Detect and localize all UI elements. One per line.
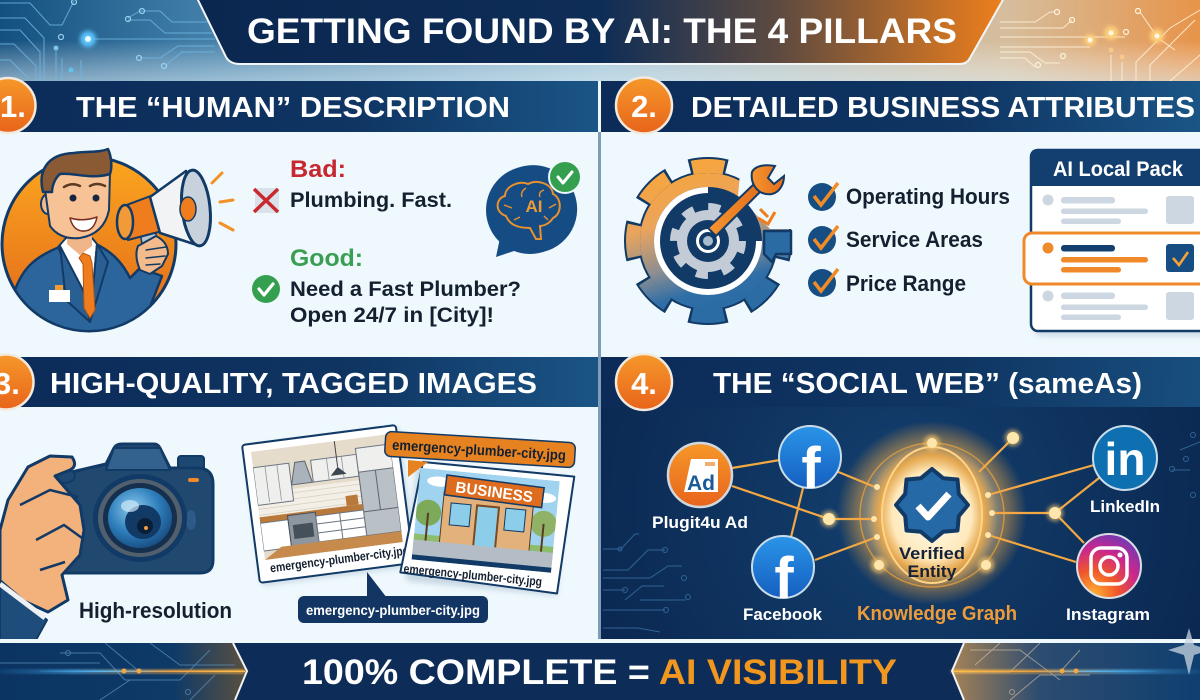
label: knowledge graph: Knowledge Graph <box>857 603 1017 625</box>
icon: gear and wrench <box>633 150 800 316</box>
AI local pack card: AI Local Pack <box>1053 158 1183 181</box>
item: operating hours <box>808 183 1010 211</box>
node: Instagram <box>1066 534 1150 624</box>
verified entity badge: Verified <box>899 544 965 563</box>
node: Facebook bottom <box>743 536 823 624</box>
number badge 3 <box>0 354 34 410</box>
highlighted row 2 <box>1024 233 1200 284</box>
node: Facebook bottom: Facebook <box>743 605 823 624</box>
panel 4 header: THE “SOCIAL WEB” (sameAs) <box>713 368 1142 400</box>
graph connection lines <box>732 438 1099 562</box>
panel 4: the social web <box>601 354 1200 639</box>
panel 1 header <box>0 81 598 132</box>
panel 3 header: HIGH-QUALITY, TAGGED IMAGES <box>50 368 537 400</box>
verified entity badge <box>896 469 968 581</box>
icon: camera held in hand <box>0 444 213 640</box>
divider between columns <box>598 132 601 639</box>
graph nodes <box>821 430 1063 573</box>
node: Plugit4u Ad: Ad <box>687 472 715 495</box>
footer left circuit chevron <box>0 643 247 700</box>
orange filename tag <box>384 431 576 477</box>
sleeve <box>0 580 47 640</box>
good example <box>252 245 521 327</box>
footer text: 100% COMPLETE = AI VISIBILITY <box>302 653 897 692</box>
item: price range <box>808 269 966 297</box>
navy filename tag <box>298 572 488 623</box>
node: Plugit4u Ad: Plugit4u Ad <box>652 513 748 532</box>
sound rays <box>212 173 233 230</box>
item: service areas: Service Areas <box>846 227 983 252</box>
panel 1: the human description <box>0 78 598 335</box>
number badge 4: 4. <box>631 366 657 401</box>
bad example <box>254 156 452 213</box>
row 1 <box>1042 194 1194 224</box>
orange filename tag: emergency-plumber-city.jpg <box>392 438 566 464</box>
bad example: Plumbing. Fast. <box>290 188 452 212</box>
photo 1: kitchen <box>242 425 416 586</box>
number badge 2: 2. <box>631 89 657 124</box>
AI local pack card <box>1024 149 1200 336</box>
caption: high-resolution: High-resolution <box>79 598 232 623</box>
node: Instagram: Instagram <box>1066 605 1150 624</box>
icon: AI brain speech bubble: AI <box>526 197 542 216</box>
photo 1: kitchen: emergency-plumber-city.jpg <box>269 543 410 575</box>
panel 4 header <box>601 357 1200 407</box>
node: Facebook top: f <box>801 436 821 501</box>
number badge 2 <box>616 78 672 134</box>
title banner <box>197 0 1004 64</box>
circuit decoration <box>603 432 1200 632</box>
megaphone <box>117 169 214 274</box>
icon: AI brain speech bubble <box>486 161 581 257</box>
number badge 4 <box>616 354 672 410</box>
panel 3: high-quality tagged images <box>0 354 598 640</box>
storefront sign <box>444 475 544 508</box>
node: Plugit4u Ad <box>652 443 748 532</box>
panel 3 header <box>0 357 598 407</box>
icon: businessman with megaphone <box>2 149 233 335</box>
row 3 <box>1042 290 1194 320</box>
panel 2 header <box>601 81 1200 132</box>
bad example: Bad: <box>290 156 346 183</box>
photo 2: storefront <box>400 461 574 596</box>
footer banner <box>0 628 1200 700</box>
photo 2: storefront: emergency-plumber-city.jpg <box>403 562 543 589</box>
node: LinkedIn <box>1090 426 1160 516</box>
number badge 1 <box>0 78 36 133</box>
panel 1 header: THE “HUMAN” DESCRIPTION <box>76 92 510 124</box>
panel 2: detailed business attributes <box>601 78 1200 336</box>
item: operating hours: Operating Hours <box>846 184 1010 209</box>
number badge 1: 1. <box>0 89 26 124</box>
node: LinkedIn: in <box>1105 433 1145 485</box>
good example: Good: <box>290 245 363 272</box>
panel 4 background <box>601 357 1200 639</box>
panel 2 header: DETAILED BUSINESS ATTRIBUTES <box>691 92 1195 124</box>
name badge <box>49 285 70 302</box>
good example: Open 24/7 in [City]! <box>290 303 494 327</box>
title: GETTING FOUND BY AI: THE 4 PILLARS <box>247 12 957 51</box>
item: service areas <box>808 226 983 254</box>
node: LinkedIn: LinkedIn <box>1090 497 1160 516</box>
attribute checklist <box>808 183 1010 297</box>
knowledge graph glow <box>837 421 1027 605</box>
item: price range: Price Range <box>846 271 966 296</box>
node: Facebook top <box>779 426 841 501</box>
good example: Need a Fast Plumber? <box>290 277 521 301</box>
node: Facebook bottom: f <box>774 546 794 611</box>
top circuit background <box>0 0 1200 81</box>
storefront sign: BUSINESS <box>454 479 534 506</box>
navy filename tag: emergency-plumber-city.jpg <box>306 602 480 618</box>
footer right circuit chevron <box>952 628 1200 700</box>
verified entity badge: Entity <box>908 562 957 581</box>
